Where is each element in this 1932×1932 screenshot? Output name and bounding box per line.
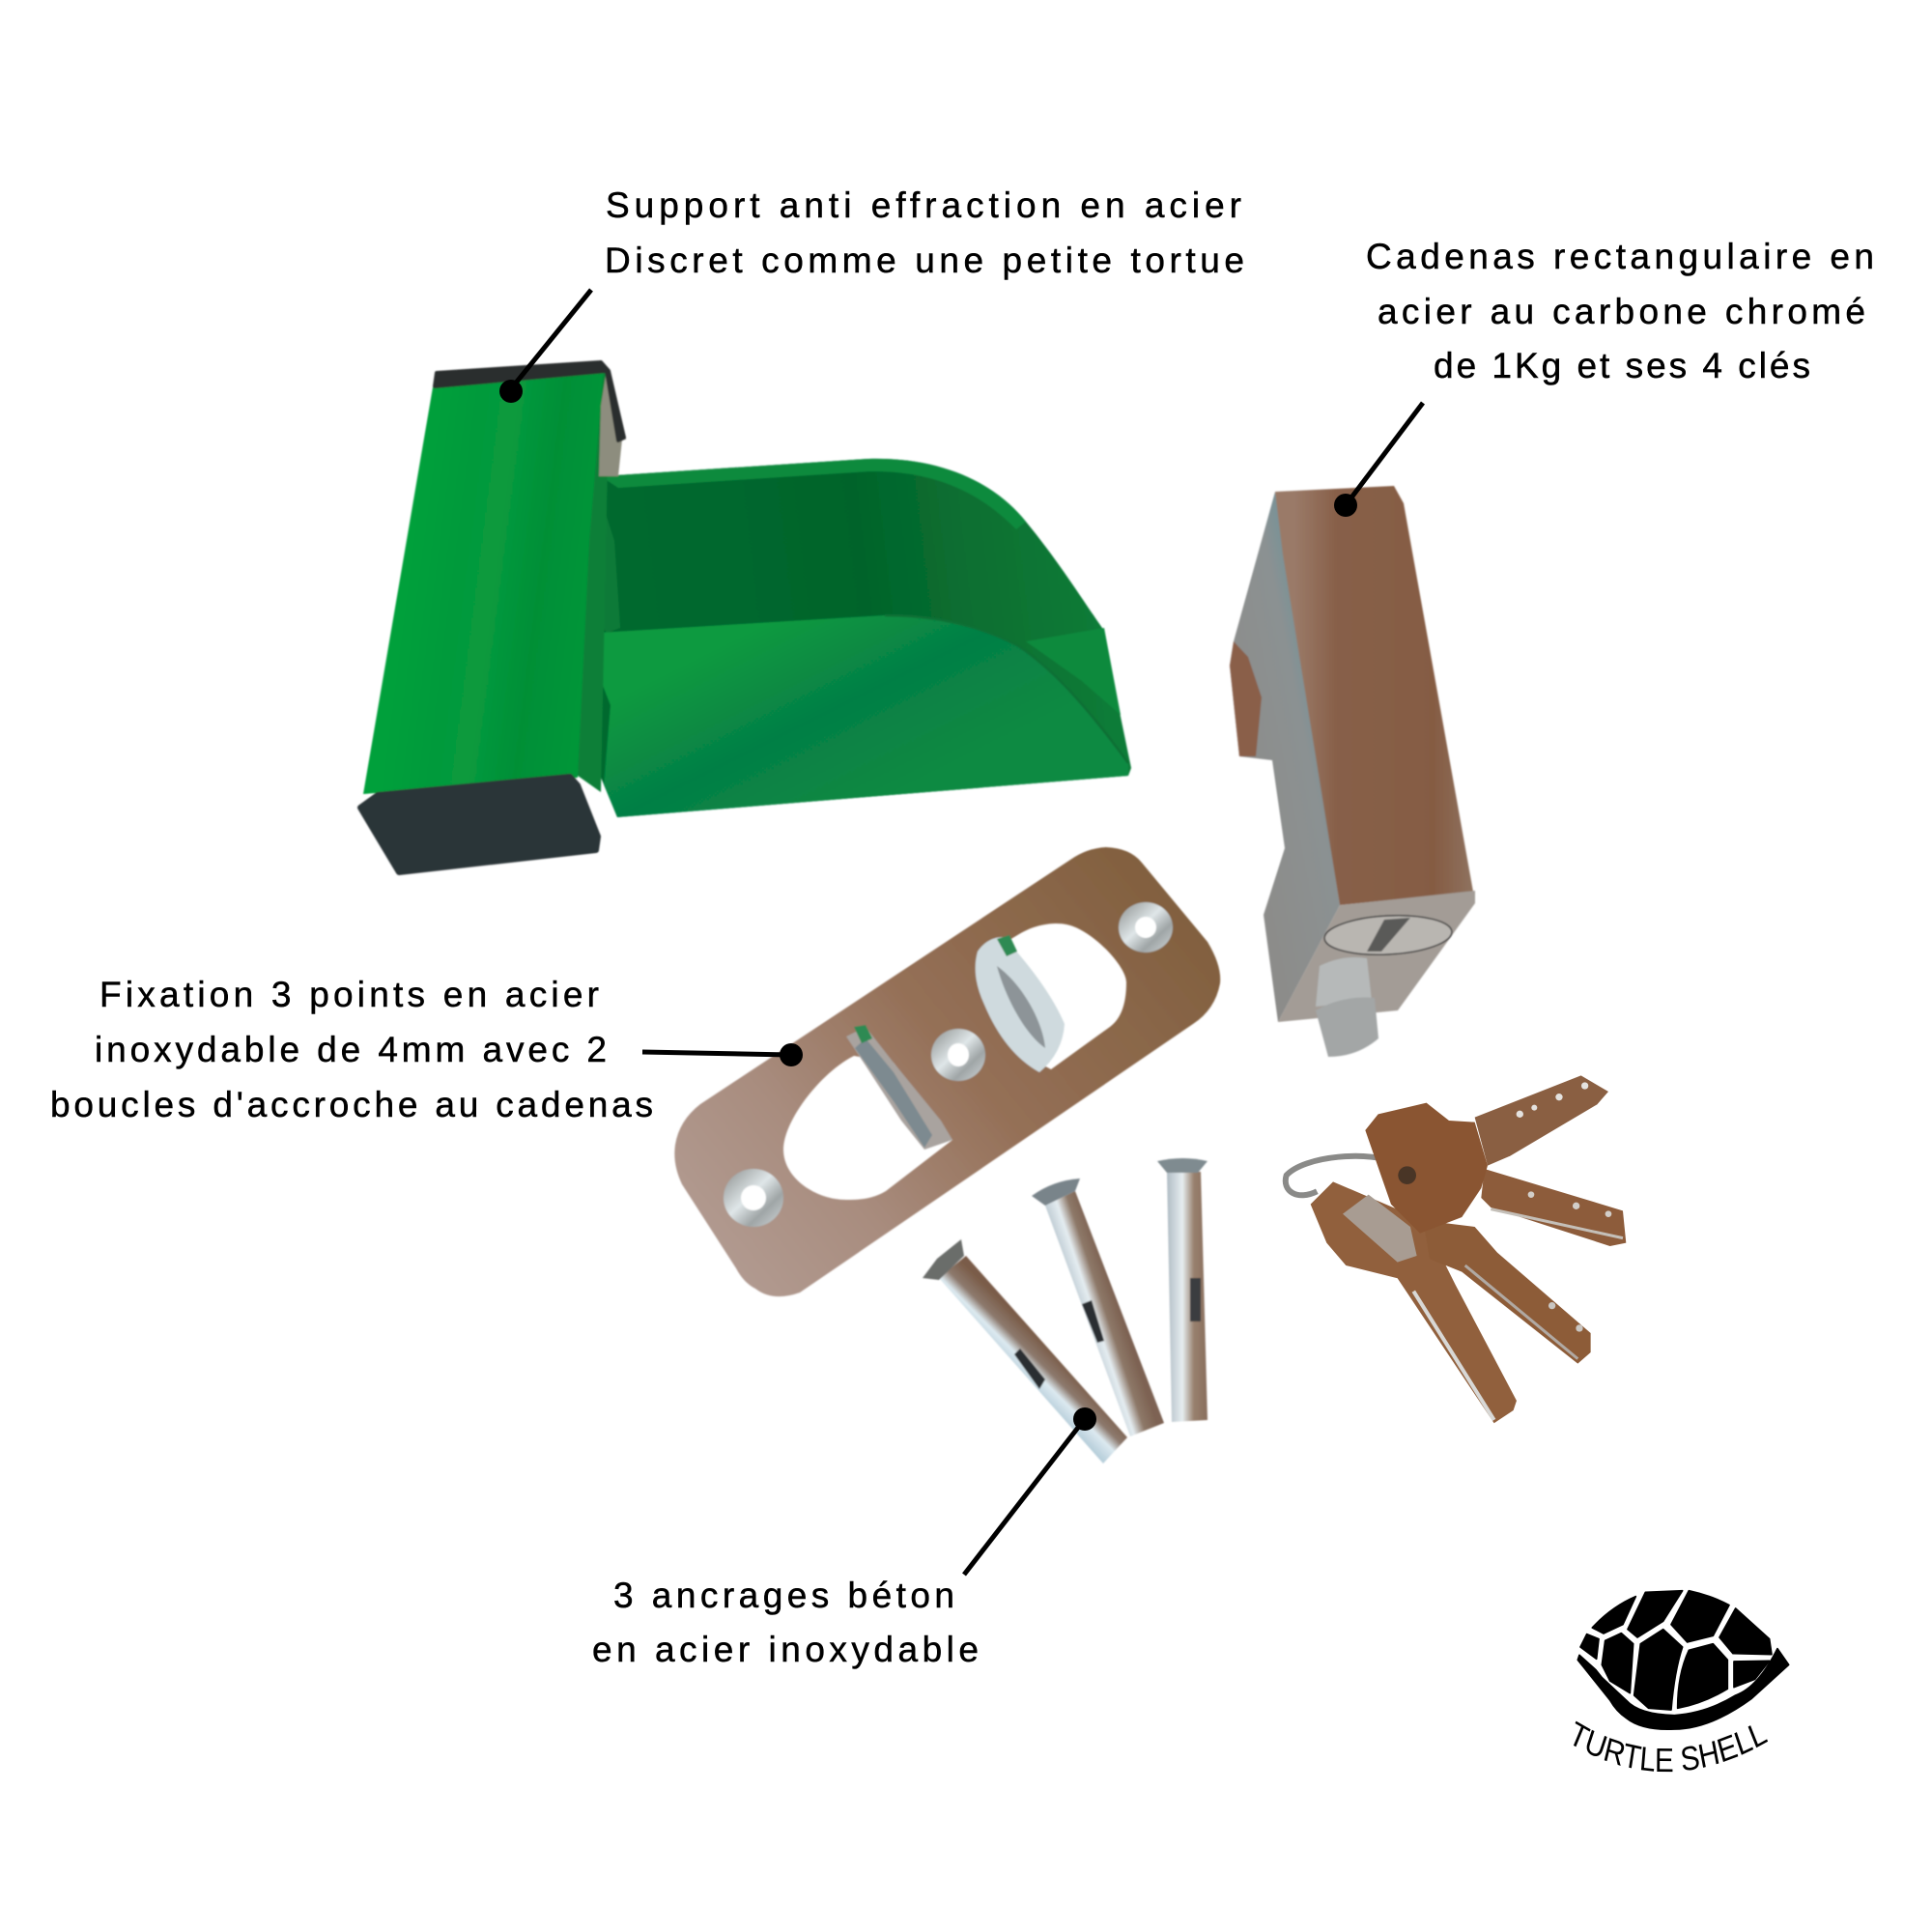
front wing <box>582 615 1128 817</box>
key ring <box>1286 1156 1401 1195</box>
photo: green anti-theft support <box>360 362 1131 872</box>
bottom end cap <box>360 777 598 872</box>
padlock front face <box>1275 486 1473 905</box>
logo wordmark: TURTLE SHELL <box>1574 1721 1768 1772</box>
callout line: plate <box>642 1043 803 1066</box>
text: padlock: Cadenas rectangulaire en <box>1366 237 1874 276</box>
tube face <box>363 368 604 794</box>
plate body with two openings <box>674 847 1220 1296</box>
lower key <box>1311 1181 1517 1423</box>
cylinder <box>1323 913 1453 957</box>
text: anchors: 3 ancrages béton <box>613 1576 954 1615</box>
text: support: Discret comme une petite tortue <box>605 241 1244 280</box>
top end cap <box>435 362 624 440</box>
icon: turtle shell <box>1577 1591 1789 1729</box>
tube side <box>578 368 610 792</box>
left loop <box>846 1027 952 1150</box>
top key <box>1475 1075 1608 1166</box>
callout line: anchors <box>964 1407 1096 1575</box>
padlock side with hook <box>1230 492 1340 1022</box>
text: support <box>605 185 1244 280</box>
text: plate: inoxydable de 4mm avec 2 <box>95 1030 607 1069</box>
anchor 1 <box>939 1256 1127 1463</box>
photo: stainless steel plate <box>674 847 1220 1296</box>
text: plate: boucles d'accroche au cadenas <box>50 1085 653 1124</box>
photo: three concrete anchors <box>923 1158 1208 1463</box>
anchor 2 <box>1045 1191 1164 1436</box>
text: padlock <box>1366 237 1874 385</box>
logo: Turtle Shell <box>1574 1590 1789 1772</box>
text: padlock: acier au carbone chromé <box>1378 292 1865 331</box>
second key <box>1481 1169 1626 1246</box>
right loop <box>976 937 1065 1072</box>
back wing <box>599 459 1131 817</box>
text: anchors: en acier inoxydable <box>592 1630 979 1669</box>
anchor 3 <box>1167 1172 1208 1422</box>
countersunk holes <box>724 1169 783 1227</box>
callout line: padlock <box>1334 403 1423 517</box>
text: support: Support anti effraction en acier <box>606 185 1241 225</box>
photo: bunch of four keys <box>1286 1075 1626 1423</box>
callout line: support <box>499 290 591 403</box>
text: plate: Fixation 3 points en acier <box>99 975 599 1014</box>
text: padlock: de 1Kg et ses 4 clés <box>1434 346 1810 385</box>
knob <box>1316 957 1372 1007</box>
third key <box>1423 1220 1591 1364</box>
photo: padlock <box>1230 486 1475 1057</box>
padlock bottom face <box>1278 891 1475 1022</box>
text: plate <box>50 975 653 1124</box>
text: anchors <box>592 1576 979 1669</box>
